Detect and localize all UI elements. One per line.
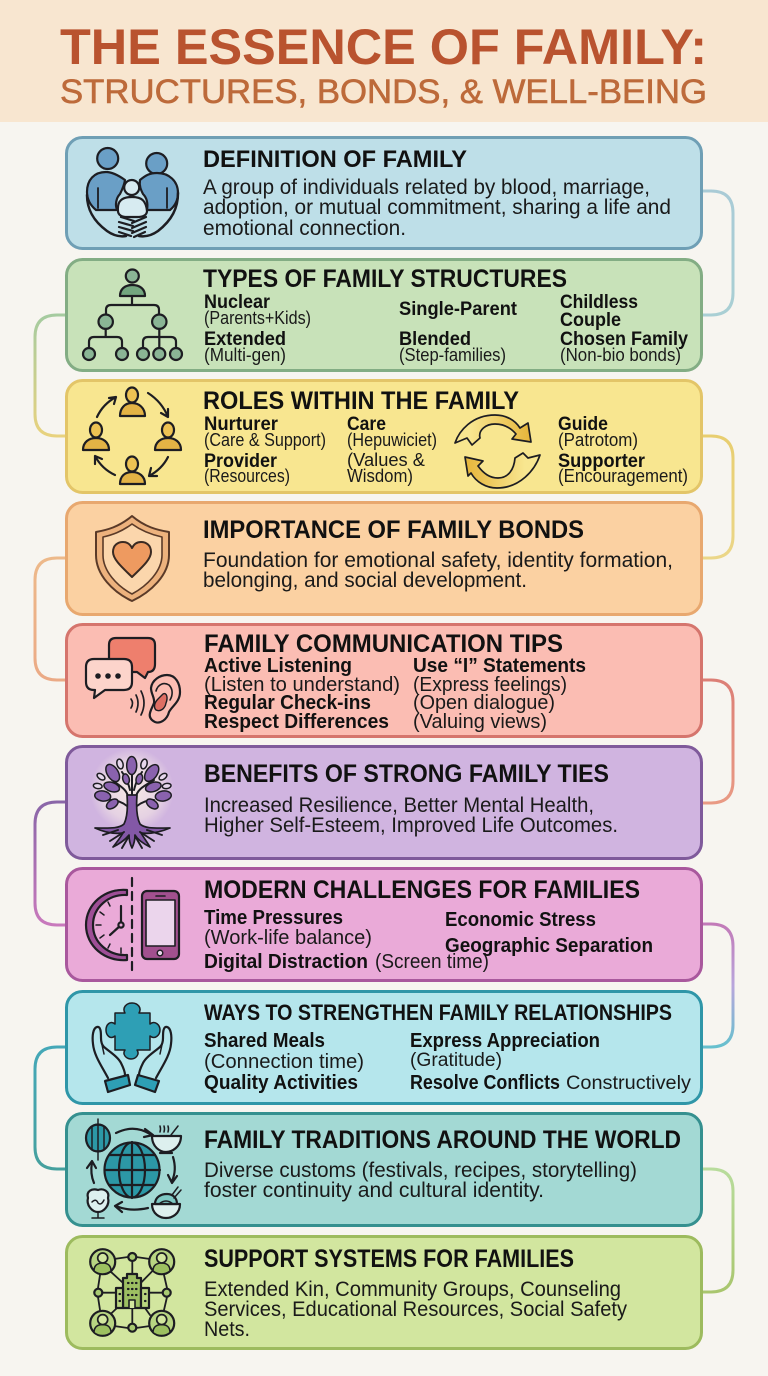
structure: nuclear <box>204 291 311 328</box>
tips: right column: Use “I” Statements <box>413 655 586 677</box>
challenge: time pressures <box>204 907 372 949</box>
icon: circular arrows <box>455 415 540 488</box>
tips: right column <box>413 655 586 733</box>
structure: single-parent: Single-Parent <box>399 298 517 320</box>
body text: Foundation for emotional safety, identity formation, <box>203 548 673 572</box>
structure: childless couple: Childless <box>560 291 638 313</box>
structure: nuclear: (Parents+Kids) <box>204 307 311 328</box>
body text: Diverse customs (festivals, recipes, storytelling) <box>204 1158 637 1182</box>
role: supporter <box>558 450 688 486</box>
body text: Extended Kin, Community Groups, Counseling <box>204 1277 621 1301</box>
body text: A group of individuals related by blood, marriage, <box>203 175 650 199</box>
role: provider <box>204 450 290 486</box>
heading: MODERN CHALLENGES FOR FAMILIES <box>204 876 640 904</box>
tips: left column: Active Listening <box>204 655 352 677</box>
heading: WAYS TO STRENGTHEN FAMILY RELATIONSHIPS <box>204 1000 672 1025</box>
role: provider: (Resources) <box>204 465 290 486</box>
body text <box>203 548 673 592</box>
structure: nuclear: Nuclear <box>204 291 270 313</box>
structure: extended: (Multi-gen) <box>204 344 286 365</box>
heading: DEFINITION OF FAMILY <box>203 146 467 173</box>
icon: hands holding puzzle piece <box>93 1003 171 1092</box>
body text: Increased Resilience, Better Mental Health, <box>204 793 594 817</box>
icon: speech bubbles and ear <box>86 638 180 723</box>
way: shared meals <box>204 1030 364 1073</box>
tips: left column: Regular Check-ins <box>204 692 371 714</box>
panel: family traditions around the world <box>66 1114 702 1226</box>
role: care <box>347 413 437 450</box>
structure: childless couple <box>560 291 638 331</box>
panel: importance of family bonds <box>66 502 702 614</box>
role: care: Care <box>347 413 386 435</box>
structure: blended: Blended <box>399 328 471 350</box>
subtitle: STRUCTURES, BONDS, & WELL-BEING <box>60 73 707 111</box>
tips: right column: (Open dialogue) <box>413 691 555 714</box>
role: supporter: (Encouragement) <box>558 465 688 486</box>
heading: FAMILY TRADITIONS AROUND THE WORLD <box>204 1126 681 1154</box>
structure: childless couple: Couple <box>560 309 621 331</box>
heading: BENEFITS OF STRONG FAMILY TIES <box>204 760 609 788</box>
panel: ways to strengthen family relationships <box>66 992 702 1104</box>
structure: chosen family: (Non-bio bonds) <box>560 344 681 365</box>
role: supporter: Supporter <box>558 450 645 472</box>
way: express appreciation: Express Appreciation <box>410 1030 600 1052</box>
connector: types to roles <box>35 315 66 436</box>
body text: Services, Educational Resources, Social Safety <box>204 1297 627 1321</box>
role: provider: Provider <box>204 450 277 472</box>
icon: clock and phone <box>86 878 179 972</box>
tips: right column: (Express feelings) <box>413 673 567 696</box>
body text <box>204 1277 627 1341</box>
title: THE ESSENCE OF FAMILY: <box>60 19 707 75</box>
panel: definition of family <box>66 138 702 248</box>
icon: support network <box>90 1249 174 1336</box>
challenge: digital distraction: (Screen time) <box>375 950 489 973</box>
way: express appreciation <box>410 1030 600 1071</box>
heading: ROLES WITHIN THE FAMILY <box>203 387 519 415</box>
structure: chosen family <box>560 328 688 365</box>
icon: family tree <box>83 270 182 360</box>
icon: globe with traditions <box>86 1119 181 1218</box>
structure: extended <box>204 328 286 365</box>
structure: extended: Extended <box>204 328 286 350</box>
body text: Higher Self-Esteem, Improved Life Outcomes. <box>204 813 618 837</box>
connector: benefits to challenges <box>35 802 66 925</box>
tips: left column: Respect Differences <box>204 711 389 733</box>
role: nurturer: Nurturer <box>204 413 278 435</box>
panel: roles within the family <box>66 380 702 492</box>
challenge: digital distraction <box>204 950 489 973</box>
challenge: digital distraction: Digital Distraction <box>204 951 368 973</box>
icon: family embrace <box>87 148 178 237</box>
connector: challenges to strengthen <box>702 924 733 1047</box>
panel: benefits of strong family ties <box>66 746 702 858</box>
tips: left column <box>204 655 400 733</box>
heading: SUPPORT SYSTEMS FOR FAMILIES <box>204 1245 574 1273</box>
connector: strengthen to traditions <box>35 1047 66 1169</box>
way: shared meals: (Connection time) <box>204 1050 364 1073</box>
body text <box>204 1158 637 1202</box>
challenge: time pressures: (Work-life balance) <box>204 926 372 949</box>
icon: rooted tree <box>90 748 174 848</box>
connector: roles to importance <box>702 436 733 558</box>
body text: emotional connection. <box>203 216 406 240</box>
way: resolve conflicts: Constructively <box>566 1073 692 1094</box>
tips: right column: (Valuing views) <box>413 710 547 733</box>
role: guide <box>558 413 638 450</box>
role: values and wisdom: (Values & <box>347 449 426 470</box>
body text: foster continuity and cultural identity. <box>204 1178 544 1202</box>
connector: definition to types <box>702 191 733 315</box>
icon: shield with heart <box>96 516 169 601</box>
connector: importance to communication <box>35 558 66 680</box>
structure: blended <box>399 328 506 365</box>
role: guide: Guide <box>558 413 608 435</box>
structure: chosen family: Chosen Family <box>560 328 688 350</box>
challenge: economic stress: Economic Stress <box>445 909 596 931</box>
role: nurturer <box>204 413 326 450</box>
heading: FAMILY COMMUNICATION TIPS <box>204 630 563 658</box>
role: values and wisdom: Wisdom) <box>347 465 413 486</box>
header band <box>0 0 768 122</box>
panel: types of family structures <box>66 260 702 370</box>
panel: modern challenges for families <box>66 868 702 980</box>
way: express appreciation: (Gratitude) <box>410 1050 502 1071</box>
way: resolve conflicts <box>410 1072 692 1094</box>
icon: circle of family roles <box>83 388 181 484</box>
body text: belonging, and social development. <box>203 568 527 592</box>
role: values and wisdom <box>347 449 426 486</box>
way: shared meals: Shared Meals <box>204 1030 325 1052</box>
body text <box>204 793 618 837</box>
role: nurturer: (Care & Support) <box>204 429 326 450</box>
challenge: geographic separation: Geographic Separation <box>445 935 653 957</box>
role: guide: (Patrotom) <box>558 429 638 450</box>
panel: family communication tips <box>66 624 702 736</box>
connector: traditions to support <box>702 1169 733 1292</box>
way: quality activities: Quality Activities <box>204 1072 358 1094</box>
heading: IMPORTANCE OF FAMILY BONDS <box>203 516 584 544</box>
role: care: (Hepuwiciet) <box>347 429 437 450</box>
challenge: time pressures: Time Pressures <box>204 907 343 929</box>
body text: adoption, or mutual commitment, sharing a life and <box>203 195 671 219</box>
body text <box>203 175 671 240</box>
panel: support systems for families <box>66 1236 702 1348</box>
connector: communication to benefits <box>702 680 733 803</box>
structure: blended: (Step-families) <box>399 344 506 365</box>
way: resolve conflicts: Resolve Conflicts <box>410 1072 560 1094</box>
body text: Nets. <box>204 1317 250 1341</box>
tips: left column: (Listen to understand) <box>204 673 400 696</box>
heading: TYPES OF FAMILY STRUCTURES <box>203 265 567 293</box>
